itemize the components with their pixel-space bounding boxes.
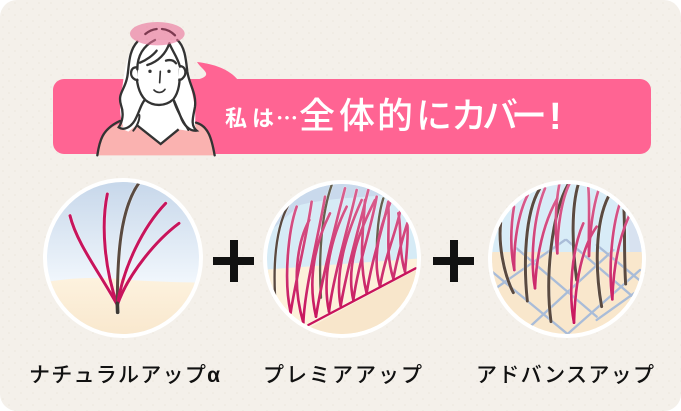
label: advance up: アドバンスアップ [476, 364, 654, 387]
circle: premier up [260, 178, 425, 345]
hair strands [70, 183, 179, 312]
circle: advance up [485, 178, 650, 342]
plus sign 2 [433, 240, 474, 282]
hair rows [275, 185, 416, 325]
plus sign 1 [213, 240, 254, 282]
banner text: 私は… [225, 101, 298, 133]
banner text: 全体的にカバー [299, 87, 547, 139]
illustration: woman with highlighted crown [97, 22, 215, 155]
banner text: ! [549, 96, 562, 138]
label: natural up alpha: ナチュラルアップα [29, 364, 220, 387]
scalp grid [490, 240, 643, 333]
speech banner [53, 62, 651, 154]
circle: natural up alpha [43, 178, 203, 338]
label: premier up: プレミアアップ [263, 364, 422, 387]
hairs [500, 184, 629, 323]
